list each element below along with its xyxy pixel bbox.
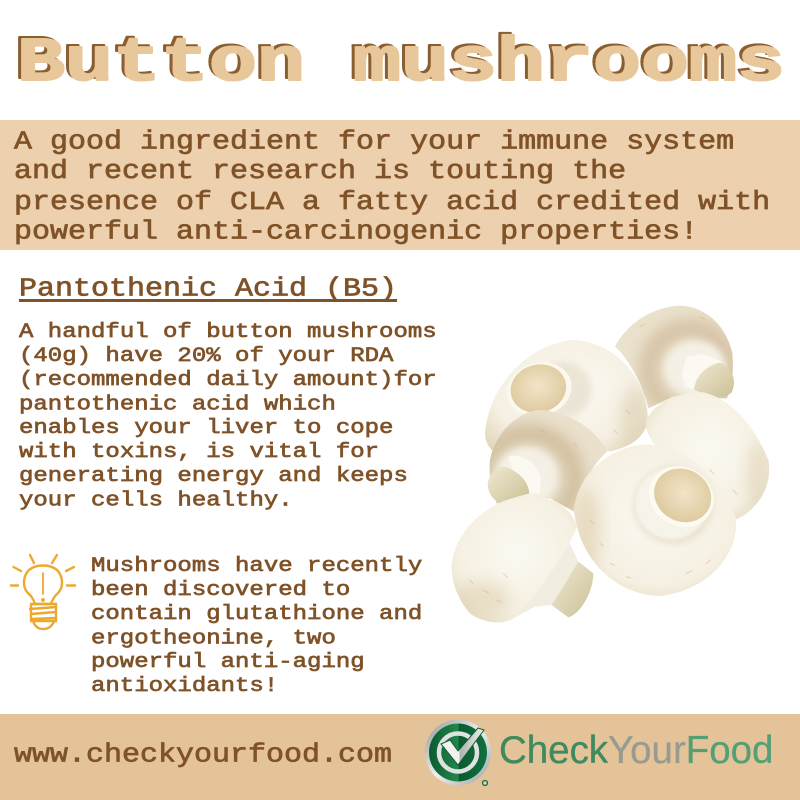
logo wordmark: CheckYourFood xyxy=(499,729,773,772)
mushroom: bottom left xyxy=(450,496,593,622)
title: Button mushrooms xyxy=(14,26,782,97)
mushroom: back right xyxy=(615,306,734,412)
mushroom: middle, gills up xyxy=(488,410,608,512)
text block: anti-aging tip: Mushrooms have recently been discovered to contain glutathione and ergotheonine, two powerful anti-aging antioxidants! xyxy=(91,555,422,698)
mushroom: large front xyxy=(573,444,736,596)
logo icon xyxy=(425,720,491,786)
text block: pantothenic acid details: A handful of button mushrooms (40g) have 20% of your RDA (recommended daily amount)for pantothenic acid which enables your liver to cope with toxins, is vital for generating energy and keeps your cells healthy. xyxy=(19,321,437,512)
mushroom: right xyxy=(646,392,773,519)
footer website: www.checkyourfood.com xyxy=(14,741,392,770)
texture: brown flecks xyxy=(470,317,737,602)
footer xyxy=(0,714,800,800)
image: button mushrooms xyxy=(452,306,770,622)
icon: light bulb xyxy=(10,554,76,630)
heading: pantothenic acid: Pantothenic Acid (B5) xyxy=(19,275,397,304)
title: Button mushrooms xyxy=(17,28,785,99)
banner: intro statement: A good ingredient for your immune system and recent research is touting the presence of CLA a fatty acid credited with powerful anti-carcinogenic properties! xyxy=(14,128,770,247)
mushroom: back left, cap up xyxy=(485,340,648,452)
